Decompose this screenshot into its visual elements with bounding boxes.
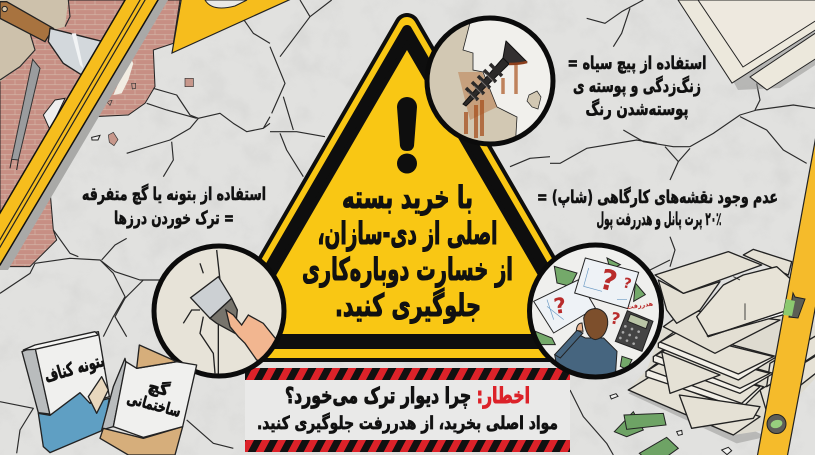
icon: exclamation mark [397,97,417,174]
icon: screw [463,41,527,106]
circle: missing shop drawings and money loss: ? [609,308,622,329]
callout: missing shop drawings [537,186,778,230]
callout: black screw: پوسته‌شدن رنگ [586,98,688,120]
plasterboard sheets: top right [678,0,815,90]
icon: set square ruler [172,0,300,53]
banner heading: اخطار: چرا دیوار ترک می‌خورد؟ [285,384,530,409]
warning triangle headline: با خرید بسته [342,180,473,216]
warning banner [245,368,570,452]
cement bag: knauf putty: بتونه کناف [42,350,107,387]
icon: yellow spirit level [757,125,815,455]
icon: diagonal yellow ruler [0,0,168,270]
warning triangle [220,26,594,349]
cement bag: knauf putty [22,332,109,453]
icon: trowel [0,2,103,75]
circle: missing shop drawings and money loss: ? [622,275,633,293]
circle: missing shop drawings and money loss: ? [597,262,620,298]
warning triangle headline: جلوگیری کنید. [335,287,481,324]
hazard stripes: top [245,368,570,380]
exposed brick and plaster: top left [0,0,193,267]
circle: missing shop drawings and money loss [530,245,662,377]
warning triangle headline: از خسارت دوباره‌کاری [302,252,513,288]
circle: putty knife on cracked joint [154,246,284,377]
callout: black screw [568,53,706,120]
icon: chisel [10,59,40,170]
callout: black screw: استفاده از پیچ سیاه = [568,53,706,74]
hazard stripes: bottom [245,440,570,452]
peeling paint and bare plaster [430,24,518,142]
warning triangle headline [302,180,513,324]
callout: black screw: زنگ‌زدگی و پوسته ی [573,75,701,97]
cement bag: building plaster [100,345,197,455]
circle: rusted black screw [425,15,555,150]
plasterboard stack: bottom right [628,249,815,443]
callout: mixed putty [82,183,266,229]
callout: mixed putty: = ترک خوردن درزها [114,208,234,229]
money bills and chips on the floor [610,394,732,455]
cement bag: building plaster: گچ [146,376,172,400]
callout: missing shop drawings: ۲۰٪ پرت پانل و هدررفت پول [596,209,722,230]
circle: missing shop drawings and money loss: ? [552,293,568,320]
warning triangle headline: اصلی از دی-سازان، [318,216,498,252]
callout: mixed putty: استفاده از بتونه یا گچ متفرقه [82,183,266,205]
circle: missing shop drawings and money loss: هدررفت [627,301,654,311]
banner subheading: مواد اصلی بخرید، از هدررفت جلوگیری کنید. [257,412,558,434]
cement bag: building plaster: ساختمانی [125,388,183,421]
